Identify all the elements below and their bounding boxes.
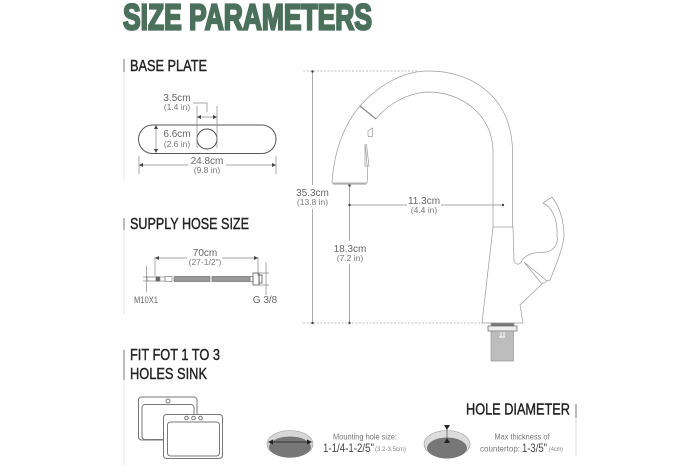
mounting hole text: 1-1/4-1-2/5" [323, 441, 374, 455]
faucet height dimension: 35.3cm [296, 188, 329, 199]
spout clearance dimension: 18.3cm [334, 244, 366, 255]
icon: three hole sink [164, 414, 222, 458]
faucet handle [523, 197, 564, 284]
countertop thickness text: countertop: [480, 444, 520, 454]
plate width dimension [139, 156, 276, 175]
icon: one hole sink [138, 397, 197, 440]
mounting hole text: Mounting hole size: [333, 432, 397, 442]
base plate outline [138, 125, 276, 154]
mounting hole text: (3.2-3.5cm) [375, 447, 406, 453]
hose length dimension [155, 248, 258, 276]
plate height dimension [154, 125, 191, 153]
hole width dimension [163, 93, 217, 148]
heading: base plate: BASE PLATE [130, 58, 207, 75]
heading: hole diameter: HOLE DIAMETER [466, 402, 570, 418]
heading second line: HOLES SINK [130, 366, 208, 383]
hole width dimension: (1.4 in) [164, 102, 190, 112]
panel: base plate [124, 58, 276, 180]
spout reach dimension [348, 196, 504, 215]
countertop thickness text: Max thickness of [494, 432, 550, 442]
faucet body [482, 227, 542, 323]
countertop thickness text: 1-3/5" [522, 441, 547, 455]
spout reach dimension: (4.4 in) [411, 205, 437, 215]
spout clearance dimension [334, 184, 366, 324]
hose drawing [147, 273, 262, 285]
panel: supply hose size [124, 216, 278, 315]
plate width dimension: 24.8cm [191, 156, 223, 167]
countertop thickness text [480, 432, 563, 455]
faucet spout [332, 71, 513, 227]
heading: supply hose size: SUPPLY HOSE SIZE [130, 216, 249, 233]
hose length dimension: 70cm [193, 248, 217, 259]
spout reach dimension: 11.3cm [408, 196, 440, 207]
plate width dimension: (9.8 in) [194, 165, 220, 175]
countertop thickness text: (4cm) [549, 447, 563, 453]
faucet height dimension: (13.8 in) [297, 197, 328, 207]
mounting hole text [323, 432, 406, 455]
spout clearance dimension: (7.2 in) [337, 253, 363, 263]
heading: fit for 1 to 3 holes sink: FIT FOT 1 TO 3 [130, 347, 220, 364]
plate height dimension: 6.6cm [163, 129, 191, 140]
hose length dimension: (27-1/2") [189, 257, 222, 267]
faucet drawing [332, 71, 564, 361]
panel: hole diameter [267, 402, 576, 458]
base plate hole [197, 129, 217, 149]
left fitting dimension: M10X1 [134, 295, 158, 305]
right fitting dimension: G 3/8 [253, 295, 278, 306]
mounting shank [488, 323, 517, 361]
spray head [332, 106, 376, 184]
plate height dimension: (2.6 in) [164, 139, 190, 149]
panel: fit for 1 to 3 holes sink [124, 347, 222, 465]
faucet height dimension [296, 70, 482, 324]
left fitting dimension [134, 266, 158, 305]
hole width dimension: 3.5cm [163, 93, 191, 104]
icon: countertop thickness [424, 425, 470, 458]
right fitting dimension [253, 262, 278, 306]
icon: mounting hole [267, 430, 313, 458]
